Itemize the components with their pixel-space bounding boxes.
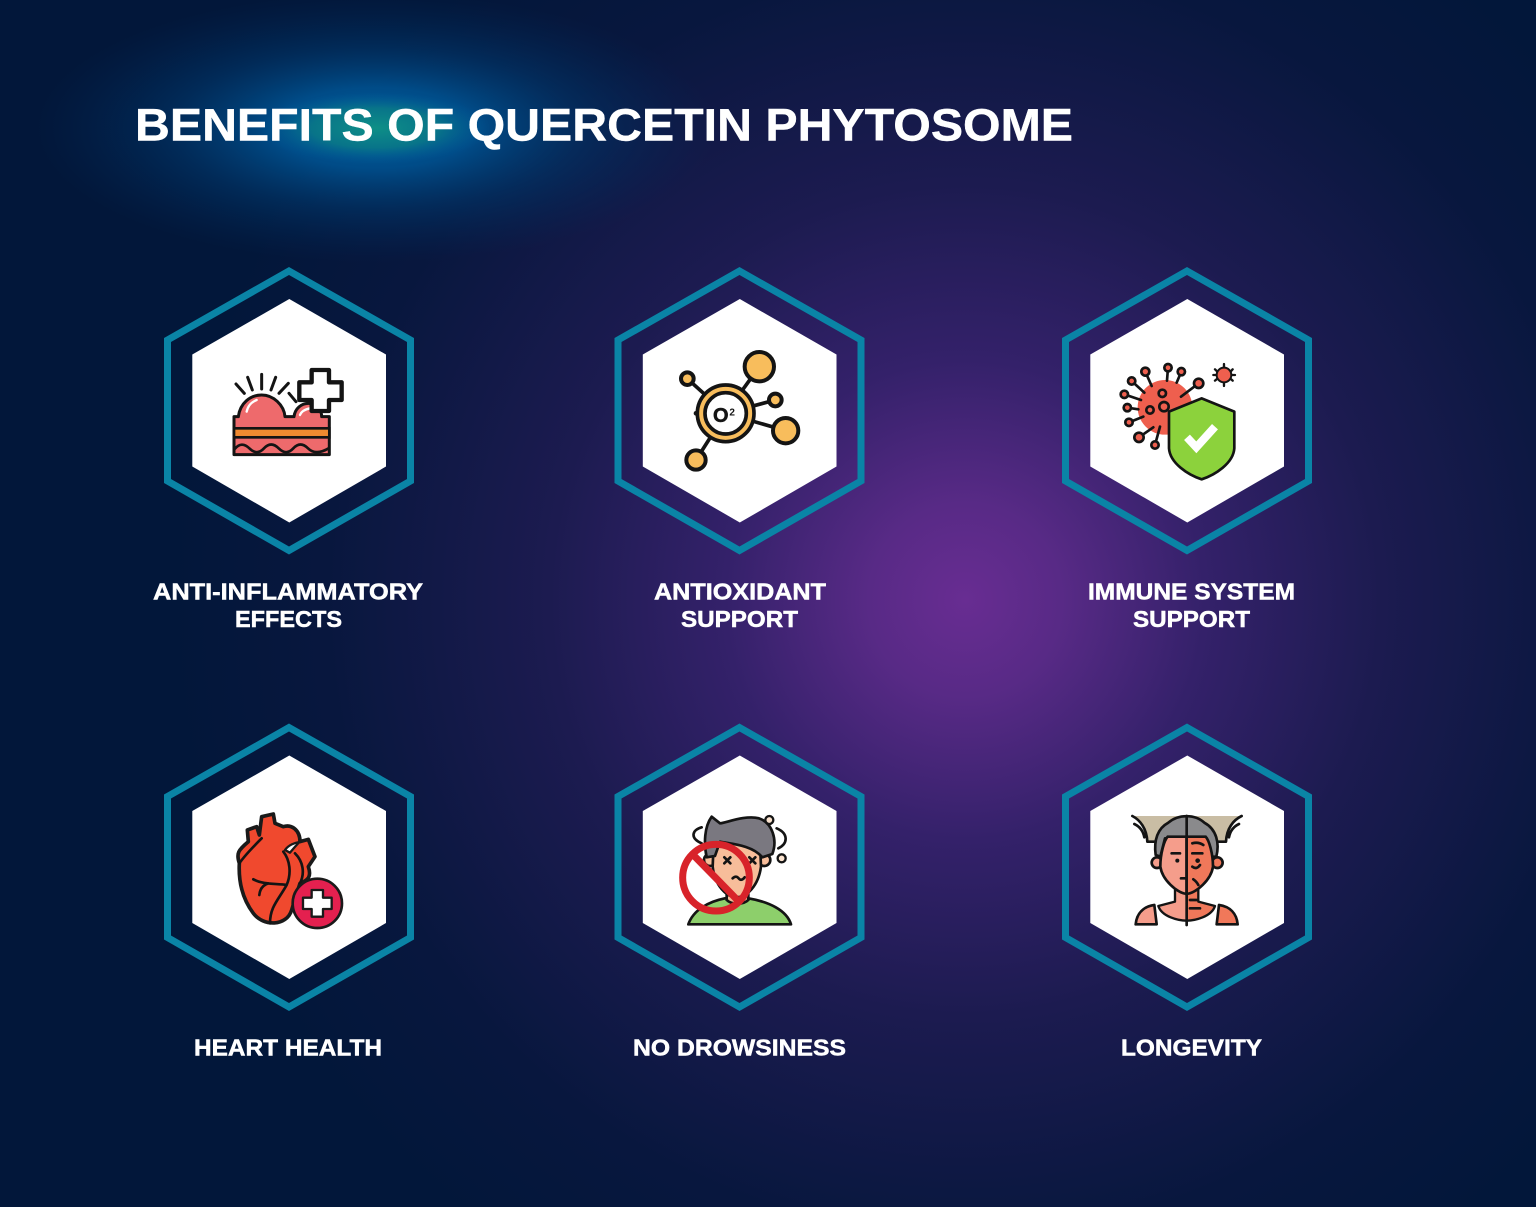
icon: oxygen molecule [681,352,798,470]
panel: antioxidant support [618,271,861,632]
white hexagon [643,299,836,522]
icon: inflamed skin with plus [234,370,342,455]
panel: anti-inflammatory effects [153,271,423,632]
label [153,578,423,632]
label: IMMUNE SYSTEM [1088,578,1295,604]
white hexagon [1090,299,1284,522]
hexagon frame [1066,271,1308,550]
label: ANTIOXIDANT [654,578,826,604]
label: HEART HEALTH [194,1034,382,1060]
hexagon frame [168,271,410,550]
title: BENEFITS OF QUERCETIN PHYTOSOME [135,100,1073,150]
icon: half young half aged face [1132,816,1242,925]
label: NO DROWSINESS [633,1034,846,1060]
label: SUPPORT [681,606,798,632]
white hexagon [1090,756,1284,979]
icon: drowsy man with prohibition sign [683,816,791,924]
hexagon frame [168,728,410,1007]
label: ANTI-INFLAMMATORY [153,578,423,604]
panel: no drowsiness [618,728,861,1060]
white hexagon [192,756,386,979]
label [654,578,826,632]
label: LONGEVITY [1121,1034,1262,1060]
icon: oxygen molecule: O [713,405,729,427]
label: SUPPORT [1133,606,1250,632]
label: EFFECTS [235,606,342,632]
hexagon frame [618,271,861,550]
icon: virus and shield [1121,364,1235,479]
white hexagon [192,299,386,522]
white hexagon [643,756,836,979]
panel: immune system support [1066,271,1308,632]
hexagon frame [618,728,861,1007]
panel: heart health [168,728,410,1060]
panel: longevity [1066,728,1308,1060]
icon: oxygen molecule: 2 [729,407,735,418]
hexagon frame [1066,728,1308,1007]
label [1088,578,1295,632]
icon: heart with medical badge [238,814,342,928]
